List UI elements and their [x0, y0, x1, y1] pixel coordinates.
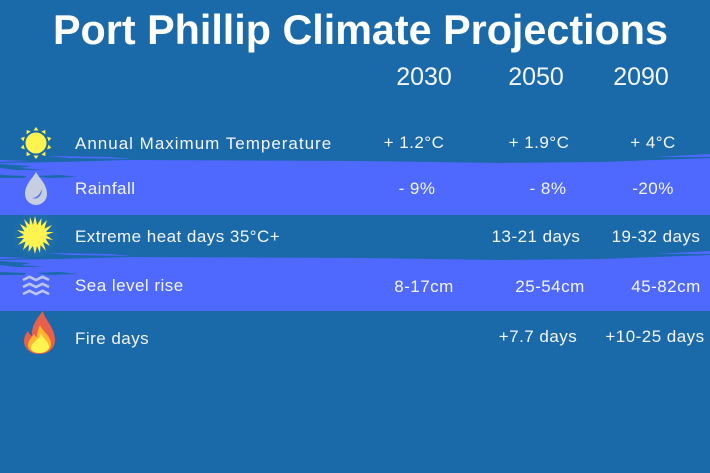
- icon: waves: [22, 276, 50, 296]
- icon: fire: [24, 311, 55, 354]
- row: extreme heat days: Extreme heat days 35°C+: [75, 227, 280, 246]
- title: Port Phillip Climate Projections: [53, 7, 668, 53]
- row: fire days: [75, 327, 705, 348]
- year headers: [396, 63, 669, 91]
- icon: burst sun: [16, 213, 54, 254]
- row: rainfall: Rainfall: [75, 179, 135, 198]
- icon: sun: [20, 127, 52, 159]
- row: sea level rise: 25-54cm: [515, 277, 585, 296]
- year headers: 2050: [508, 63, 564, 91]
- row: annual maximum temperature: + 1.9°C: [509, 133, 569, 152]
- row: rainfall: - 9%: [399, 179, 435, 198]
- row: annual maximum temperature: [75, 133, 676, 153]
- row: fire days: Fire days: [75, 329, 149, 348]
- row: extreme heat days: 13-21 days: [492, 227, 580, 246]
- row: annual maximum temperature: + 4°C: [630, 133, 676, 152]
- icon: water drop: [25, 172, 47, 205]
- row: sea level rise: Sea level rise: [75, 276, 184, 295]
- row: sea level rise: 8-17cm: [394, 277, 454, 296]
- year headers: 2090: [613, 63, 669, 91]
- row: sea level rise: [75, 276, 701, 296]
- row: rainfall: -20%: [632, 179, 674, 198]
- row: sea level rise: 45-82cm: [631, 277, 701, 296]
- row: annual maximum temperature: + 1.2°C: [384, 133, 444, 152]
- row: extreme heat days: 19-32 days: [612, 227, 700, 246]
- row: rainfall: [75, 179, 674, 198]
- row: fire days: +10-25 days: [605, 327, 705, 346]
- row: fire days: +7.7 days: [499, 327, 577, 346]
- year headers: 2030: [396, 63, 452, 91]
- row: extreme heat days: [75, 227, 700, 246]
- row: rainfall: - 8%: [530, 179, 566, 198]
- row: annual maximum temperature: Annual Maximum Temperature: [75, 134, 332, 153]
